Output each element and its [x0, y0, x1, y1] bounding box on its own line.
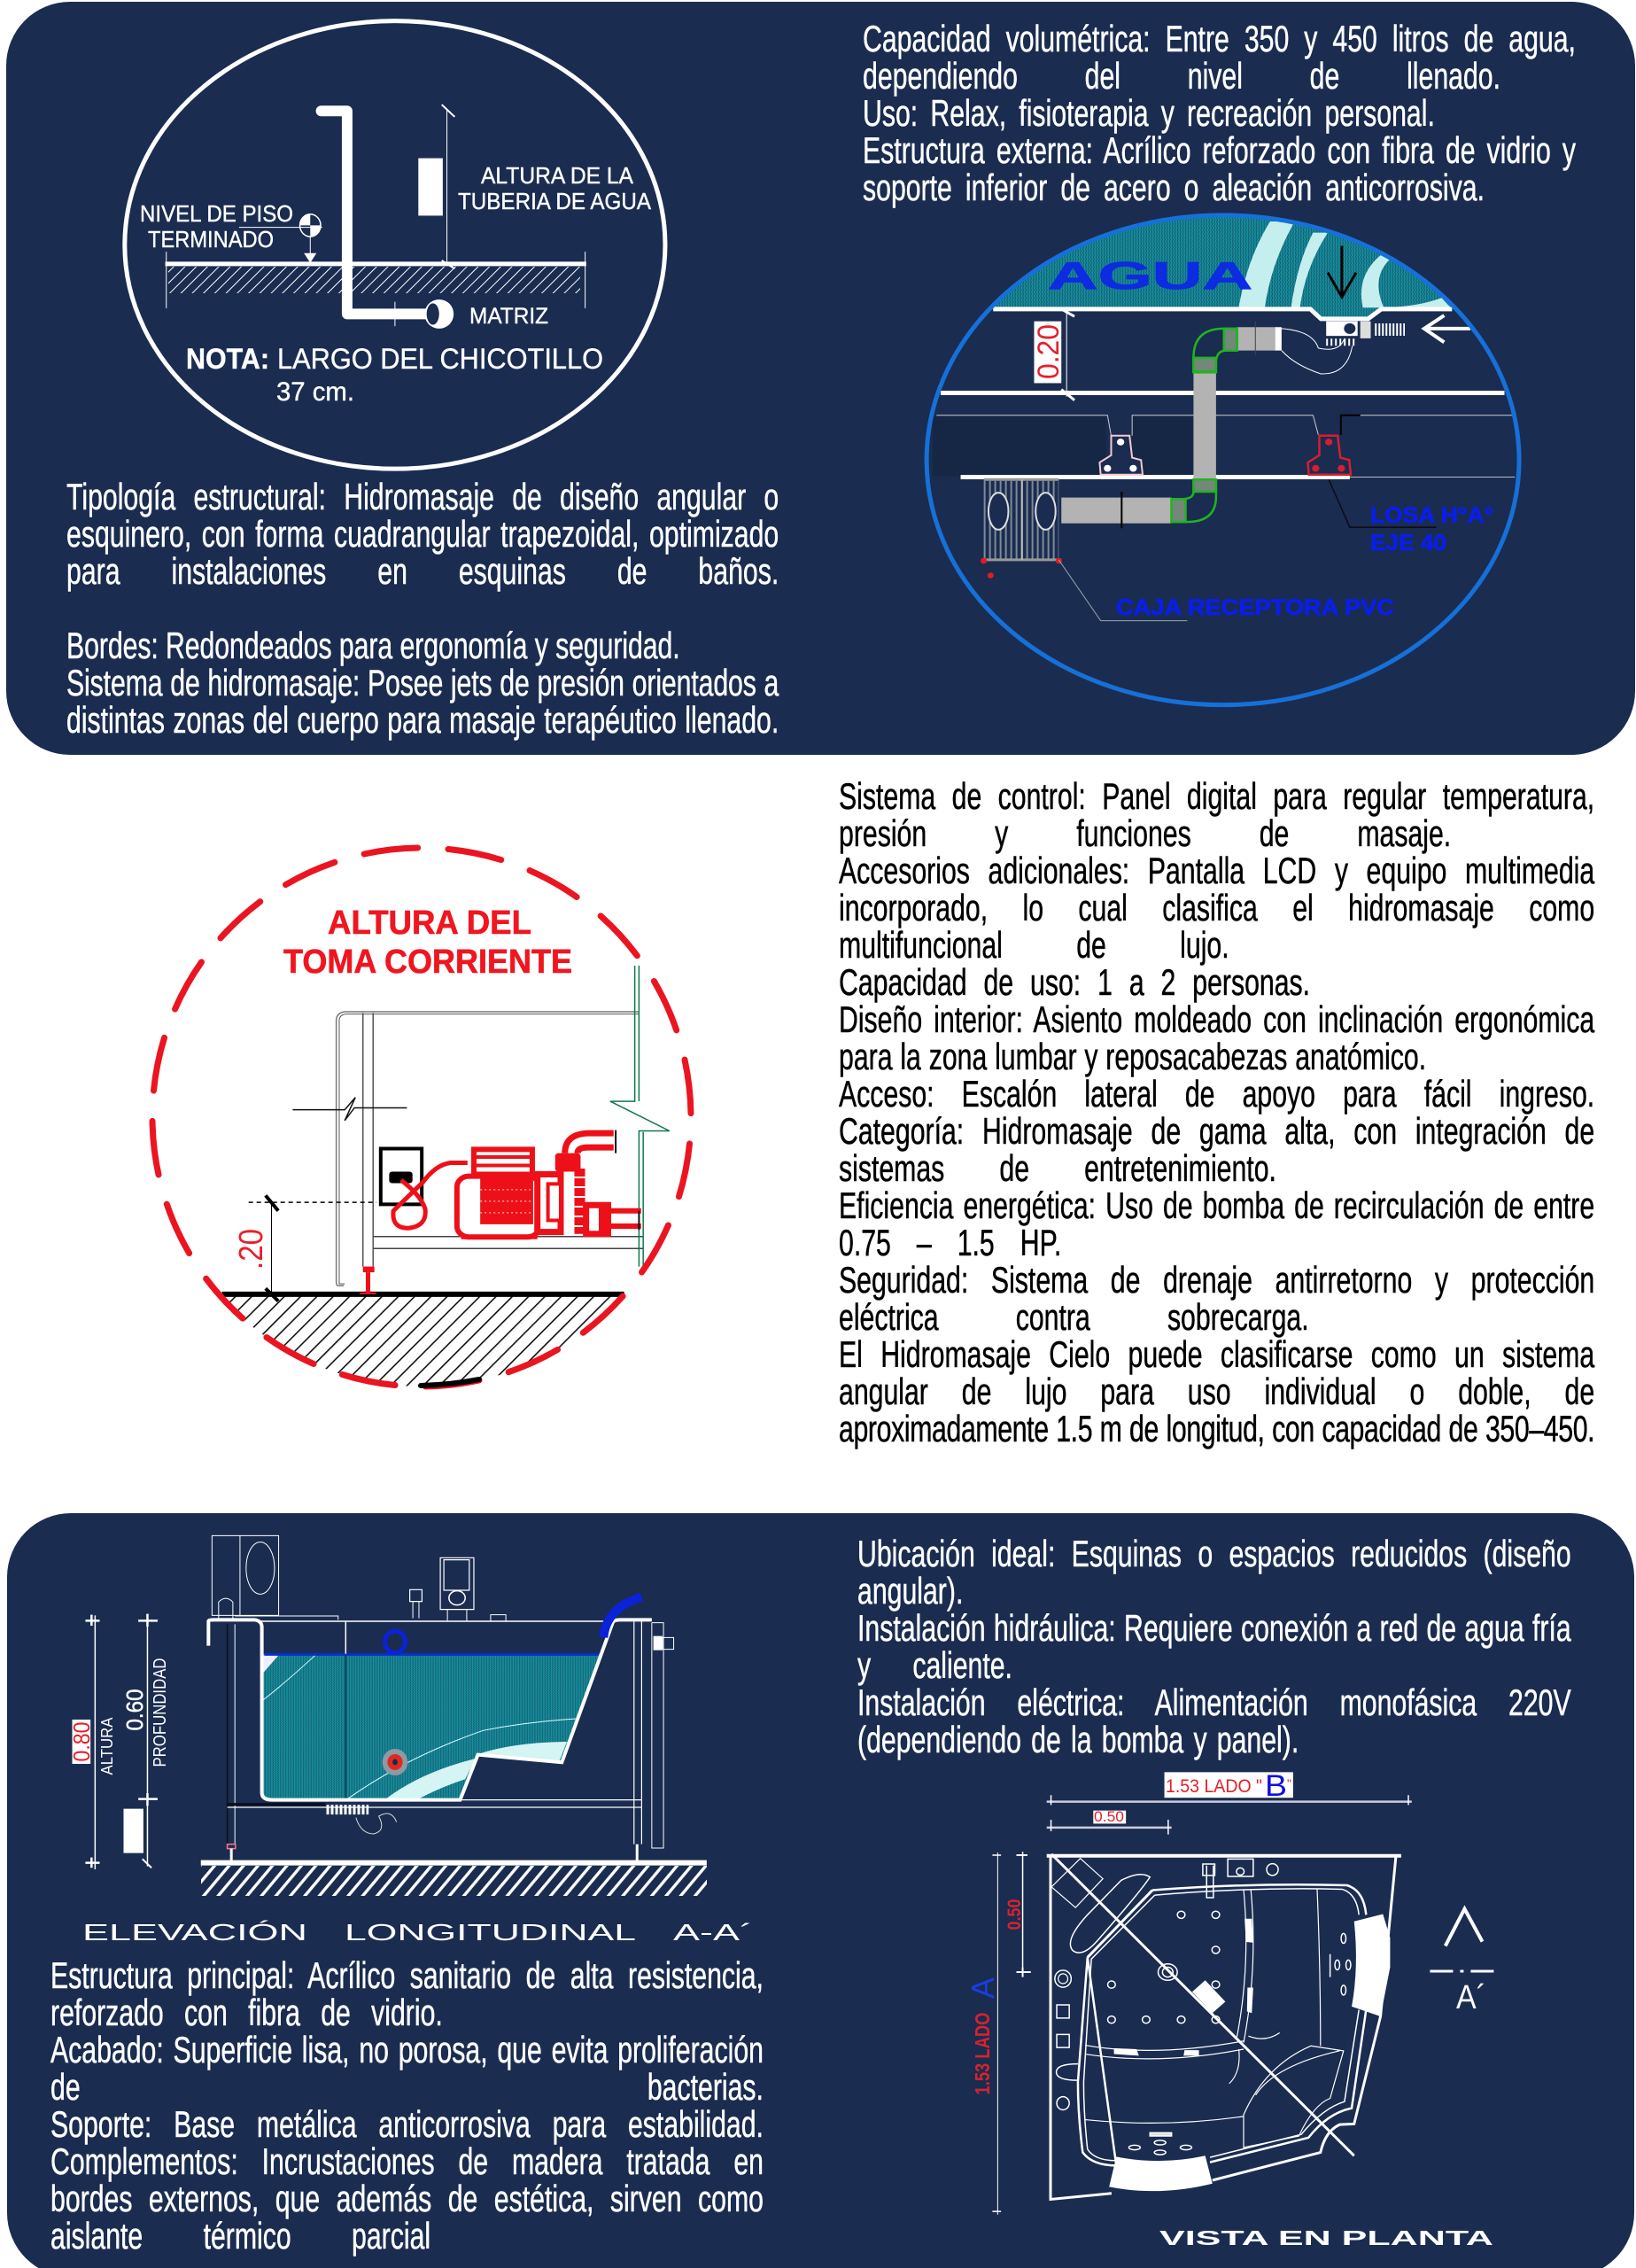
tub frame, wall and pump [222, 966, 670, 1301]
diagram: water pipe height inside white ellipse [125, 21, 665, 469]
text block: control, accesorios, seguridad: incorporado, lo cual clasifica el hidromasaje como [839, 887, 1594, 928]
label: .20: .20 [233, 1229, 270, 1270]
dimension labels: PROFUNDIDAD [151, 1658, 170, 1767]
label: altura de la tuberia [140, 162, 652, 407]
labels: plan dimensions: 0.50 [1094, 1808, 1124, 1825]
text block: estructura principal, acabado, soporte: Estructura principal: Acrílico sanitario de alta resistencia, [50, 1954, 764, 1996]
text block: control, accesorios, seguridad: Capacidad de uso: 1 a 2 personas. [839, 961, 1310, 1003]
text block: estructura principal, acabado, soporte: Acabado: Superficie lisa, no porosa, que evita proliferación [50, 2029, 764, 2070]
control panel [440, 1557, 474, 1610]
diagram: plan view of corner tub [965, 1769, 1496, 2249]
text block: ubicacion e instalaciones: (dependiendo de la bomba y panel). [857, 1719, 1299, 1760]
caption: elevacion longitudinal: LONGITUDINAL [345, 1919, 636, 1946]
dimension [1034, 322, 1061, 383]
text block: tipologia, bordes, sistema: distintas zonas del cuerpo para masaje terapéutico llenado. [66, 699, 779, 741]
concrete slab lines [993, 309, 1452, 319]
label: altura de la tuberia: LARGO DEL CHICOTILLO [277, 343, 603, 375]
dimension labels [68, 1658, 170, 1775]
dimension labels: ALTURA [98, 1717, 116, 1775]
text block: estructura principal, acabado, soporte: Soporte: Base metálica anticorrosiva para estabilidad. [50, 2103, 764, 2145]
arrows [1328, 245, 1356, 297]
labels: blue notes: CAJA RECEPTORA PVC [1116, 595, 1394, 620]
outer outline [1047, 1854, 1401, 1858]
labels: plan dimensions: 1.53 LADO [971, 2013, 994, 2094]
text block: control, accesorios, seguridad: sistemas de entretenimiento. [839, 1147, 1276, 1189]
text block: tipologia, bordes, sistema [66, 476, 779, 741]
text block: control, accesorios, seguridad: Eficiencia energética: Uso de bomba de recirculación de entre [839, 1184, 1594, 1226]
grey pipes [1193, 372, 1216, 479]
receptor box [984, 481, 1058, 559]
text block: control, accesorios, seguridad: 0.75 – 1.5 HP. [839, 1222, 1061, 1263]
text block: capacidad, uso, estructura: Capacidad volumétrica: Entre 350 y 450 litros de agua, [863, 18, 1576, 59]
panel: bottom navy background [7, 1513, 1634, 2268]
diagram: socket height with pump in red dashed circle [152, 848, 691, 1394]
dimensions [95, 1615, 147, 1869]
green elbows [1193, 329, 1237, 372]
text block: control, accesorios, seguridad: El Hidromasaje Cielo puede clasificarse como un sistema [839, 1333, 1594, 1375]
jet device [1326, 322, 1358, 336]
text block: estructura principal, acabado, soporte: reforzado con fibra de vidrio. [50, 1992, 443, 2033]
labels: plan dimensions [965, 1769, 1486, 2094]
text block: capacidad, uso, estructura: Estructura externa: Acrílico reforzado con fibra de vidrio y [863, 129, 1576, 171]
motor [474, 1149, 532, 1175]
text block: control, accesorios, seguridad: angular de lujo para uso individual o doble, de [839, 1371, 1594, 1412]
dimension labels: 0.60 [121, 1689, 148, 1731]
deck accessories [1051, 1859, 1103, 1907]
text block: control, accesorios, seguridad: eléctrica contra sobrecarga. [839, 1296, 1309, 1338]
label: AGUA: AGUA [1048, 254, 1252, 298]
label: altura de la tuberia: TERMINADO [148, 226, 274, 252]
text block: estructura principal, acabado, soporte: bordes externos, que además de estética, sirven como [50, 2178, 764, 2219]
text block: tipologia, bordes, sistema: Bordes: Redondeados para ergonomía y seguridad. [66, 625, 680, 666]
text block: tipologia, bordes, sistema: para instalaciones en esquinas de baños. [66, 550, 779, 592]
text block: tipologia, bordes, sistema: esquinero, con forma cuadrangular trapezoidal, optimizado [66, 513, 779, 555]
text block: ubicacion e instalaciones [857, 1533, 1571, 1760]
text block: control, accesorios, seguridad: Acceso: Escalón lateral de apoyo para fácil ingreso. [839, 1073, 1594, 1115]
labels: plan dimensions: A [965, 1977, 1001, 1999]
title: altura del toma corriente: TOMA CORRIENTE [283, 944, 572, 981]
dimension labels: 0.80 [68, 1722, 95, 1761]
text block: control, accesorios, seguridad: Sistema de control: Panel digital para regular temperatura, [839, 775, 1594, 817]
inner tub outlines [1078, 1884, 1366, 2165]
text block: control, accesorios, seguridad: aproximadamente 1.5 m de longitud, con capacidad de 350–450. [839, 1408, 1594, 1449]
text block: control, accesorios, seguridad: presión y funciones de masaje. [839, 812, 1451, 854]
label: altura de la tuberia: MATRIZ [469, 304, 548, 329]
diagram: drain section inside blue ellipse [919, 209, 1519, 705]
text block: capacidad, uso, estructura: dependiendo del nivel de llenado. [863, 55, 1500, 97]
text block: control, accesorios, seguridad: Seguridad: Sistema de drenaje antirretorno y protección [839, 1259, 1594, 1301]
leaders [1329, 479, 1437, 527]
ellipse, pipe and dimension lines [125, 21, 665, 469]
label: altura de la tuberia: TUBERIA DE AGUA [458, 188, 652, 214]
labels: blue notes: LOSA H°A° [1370, 503, 1493, 528]
ground hatching [229, 1297, 611, 1386]
text block: tipologia, bordes, sistema: Sistema de hidromasaje: Posee jets de presión orientados a [66, 662, 779, 703]
label: altura de la tuberia: NOTA: [186, 343, 269, 375]
diagonal section line [1051, 1854, 1354, 2155]
text block: capacidad, uso, estructura: Uso: Relax, fisioterapia y recreación personal. [863, 92, 1435, 134]
label: 0.20: 0.20 [1032, 324, 1066, 379]
floor hatching [168, 267, 580, 293]
caption: elevacion longitudinal: A-A´ [673, 1919, 753, 1946]
text block: estructura principal, acabado, soporte: Complementos: Incrustaciones de madera tratada en [50, 2140, 764, 2182]
section and seat lines [1085, 1889, 1344, 2148]
label: altura de la tuberia: ALTURA DE LA [481, 162, 634, 189]
labels: blue notes: EJE 40 [1370, 531, 1446, 555]
wall jet [383, 1749, 407, 1775]
labels: blue notes [1116, 503, 1493, 620]
text block: estructura principal, acabado, soporte: de bacterias. [50, 2066, 764, 2108]
under jet [327, 1805, 368, 1814]
text block: control, accesorios, seguridad: multifuncional de lujo. [839, 924, 1229, 966]
text block: estructura principal, acabado, soporte: aislante térmico parcial [50, 2215, 430, 2256]
text block: ubicacion e instalaciones: y caliente. [857, 1644, 1012, 1686]
caption: elevacion longitudinal: ELEVACIÓN [82, 1919, 307, 1946]
text block: capacidad, uso, estructura [863, 18, 1577, 208]
brackets [1099, 436, 1143, 475]
text block: estructura principal, acabado, soporte [50, 1954, 764, 2256]
text block: control, accesorios, seguridad: Accesorios adicionales: Pantalla LCD y equipo multimedia [839, 850, 1594, 891]
water area [934, 217, 1453, 477]
labels: plan dimensions: " [1287, 1776, 1291, 1790]
tub outline [208, 1619, 652, 1800]
water [262, 1654, 600, 1800]
label boxes and dimensions [1165, 1772, 1293, 1798]
text block: control, accesorios, seguridad [838, 775, 1594, 1449]
black arc at bottom [421, 1379, 479, 1386]
label: altura de la tuberia: 37 cm. [276, 377, 354, 407]
labels: plan dimensions: A´ [1456, 1979, 1486, 2016]
diagram: longitudinal elevation A-A [68, 1535, 753, 1946]
red dashed circle [152, 848, 691, 1386]
text block: control, accesorios, seguridad: para la zona lumbar y reposacabezas anatómico. [839, 1036, 1426, 1077]
text block: control, accesorios, seguridad: Diseño interior: Asiento moldeado con inclinación ergonómica [839, 998, 1594, 1040]
floor hatching [201, 1866, 707, 1896]
title: altura del toma corriente [283, 905, 572, 981]
section mark [1446, 1909, 1483, 1946]
legs and frame [227, 1624, 229, 1845]
label: altura de la tuberia: NIVEL DE PISO [140, 200, 293, 227]
blue ellipse [927, 215, 1519, 705]
title: altura del toma corriente: ALTURA DEL [328, 905, 531, 942]
panel: top navy background [6, 2, 1635, 755]
cushions and pads [1109, 1915, 1390, 2191]
text block: capacidad, uso, estructura: soporte inferior de acero o aleación anticorrosiva. [863, 167, 1485, 208]
text block: ubicacion e instalaciones: Instalación hidráulica: Requiere conexión a red de agua fría [857, 1607, 1571, 1649]
text block: ubicacion e instalaciones: Instalación eléctrica: Alimentación monofásica 220V [857, 1682, 1571, 1723]
caption: elevacion longitudinal [82, 1919, 753, 1946]
text block: ubicacion e instalaciones: Ubicación ideal: Esquinas o espacios reducidos (diseño [857, 1533, 1571, 1574]
blue ring and faucet [385, 1631, 405, 1653]
labels: plan dimensions: B [1265, 1769, 1287, 1803]
power cord [393, 1162, 468, 1228]
jets [1108, 1911, 1351, 2155]
labels: plan dimensions: 0.50 [1004, 1899, 1025, 1930]
text block: ubicacion e instalaciones: angular). [857, 1570, 963, 1612]
caption: vista en planta: VISTA EN PLANTA [1159, 2226, 1493, 2249]
text block: control, accesorios, seguridad: Categoría: Hidromasaje de gama alta, con integración de [839, 1110, 1594, 1152]
speaker [212, 1535, 279, 1615]
labels: plan dimensions: 1.53 LADO " [1166, 1776, 1262, 1797]
text block: tipologia, bordes, sistema: Tipología estructural: Hidromasaje de diseño angular o [66, 476, 779, 517]
